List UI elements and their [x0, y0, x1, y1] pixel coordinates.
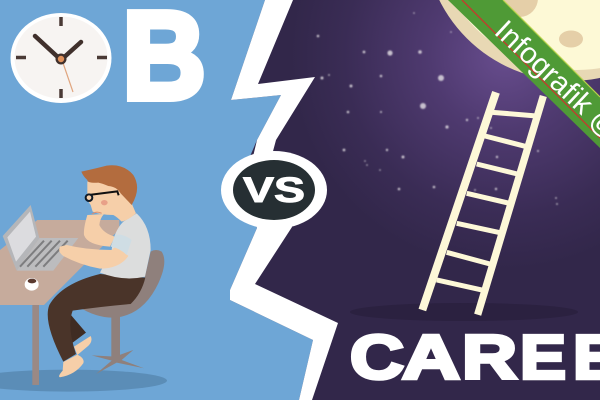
heading: career: C — [350, 324, 404, 392]
floor shadow — [0, 370, 167, 392]
chair — [78, 250, 164, 374]
coffee cup — [25, 278, 39, 291]
illustration: man at desk — [0, 165, 167, 392]
stars — [317, 12, 558, 205]
heading: career: E — [520, 324, 566, 392]
trousers — [48, 274, 145, 362]
laptop — [3, 205, 78, 271]
desk top — [0, 220, 119, 305]
banner — [448, 0, 600, 148]
panel: job background — [0, 0, 313, 400]
heading: career: A — [402, 324, 460, 392]
front foot — [59, 355, 84, 377]
heading: career: R — [462, 324, 517, 392]
ladder shadow — [350, 303, 578, 321]
ladder — [422, 92, 543, 315]
sleeve — [111, 235, 132, 255]
vs badge: VS — [243, 171, 305, 210]
clock icon — [10, 13, 112, 103]
vs badge — [221, 151, 327, 229]
heading: career — [350, 324, 600, 392]
arms — [59, 214, 128, 269]
desk leg — [32, 303, 39, 385]
rear leg and foot — [66, 310, 91, 355]
lightning divider — [230, 0, 338, 400]
shirt — [100, 213, 151, 278]
moon — [424, 0, 600, 81]
head — [81, 165, 137, 222]
